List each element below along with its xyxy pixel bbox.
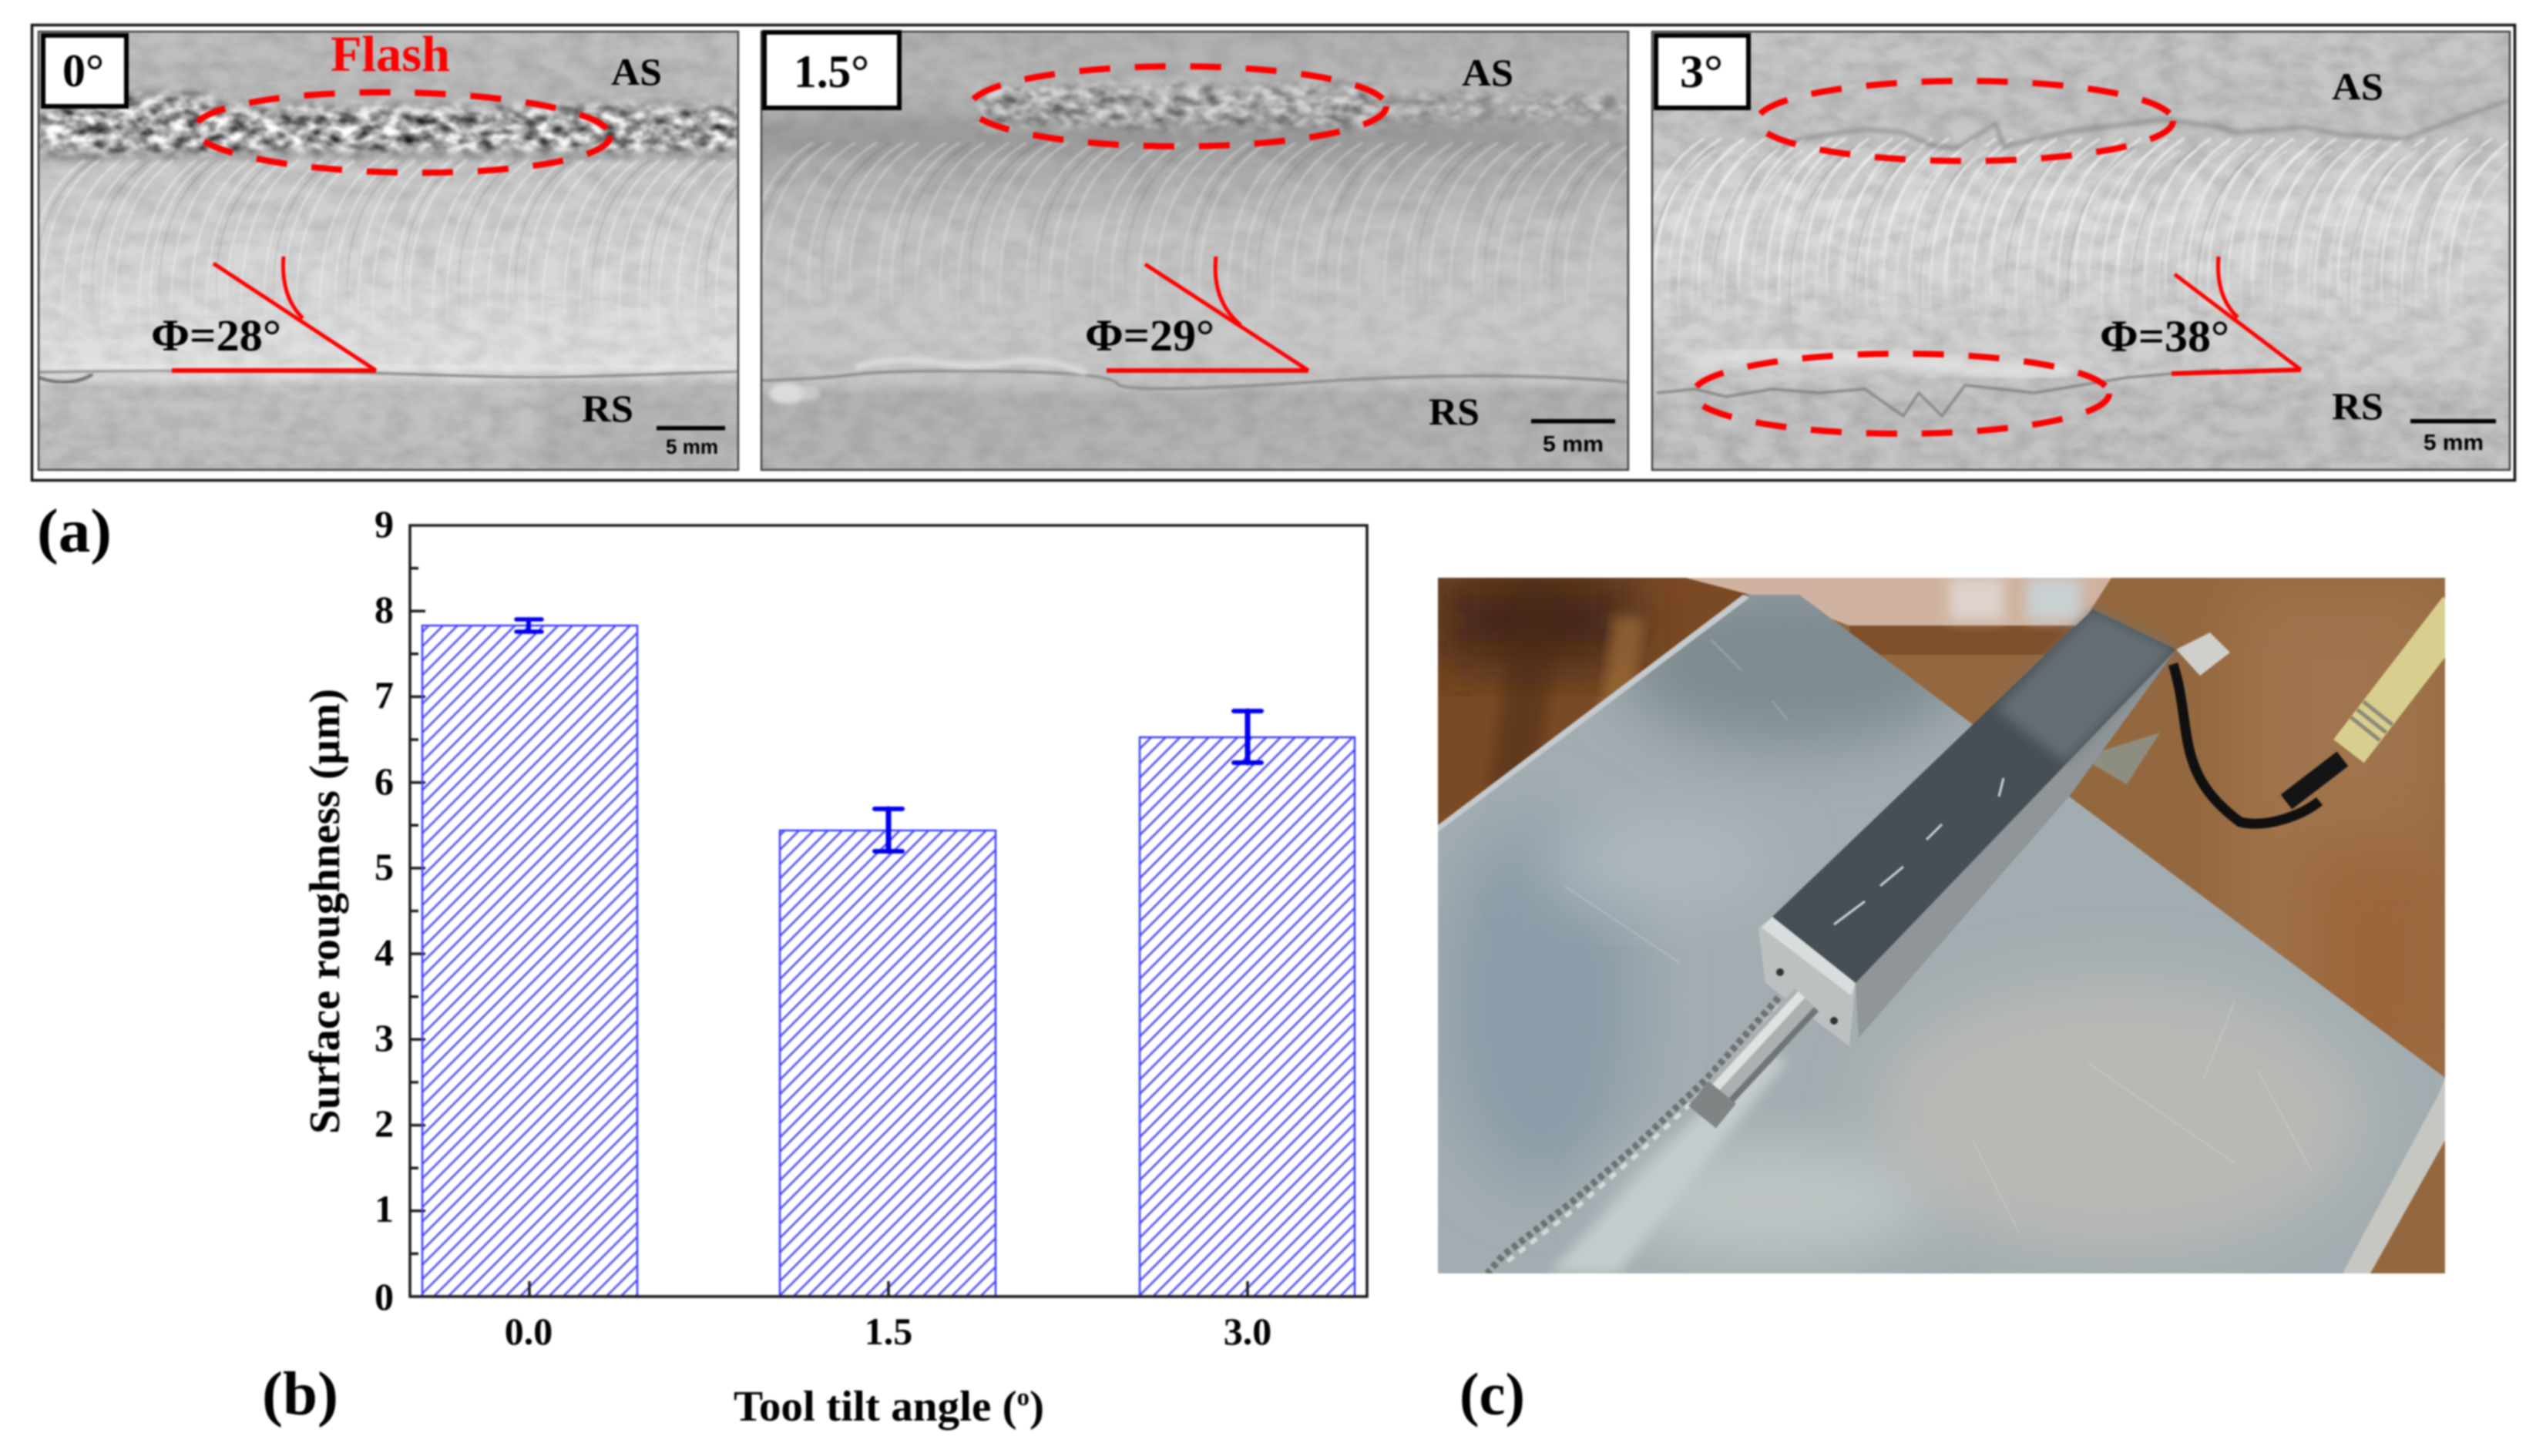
stylus rod	[1702, 995, 1816, 1117]
clamp at far end	[2176, 632, 2230, 676]
callout: lower flash ellipse	[1693, 354, 2109, 434]
panel: tilt angle 3 degrees	[1638, 32, 2527, 470]
y-axis tick labels: 6	[375, 760, 394, 803]
reflection strip at back of table	[1685, 578, 2111, 626]
label: RS: RS	[1429, 390, 1480, 433]
y-axis tick labels: 4	[375, 931, 394, 974]
x-axis tick labels: 1.5	[865, 1310, 912, 1353]
panel: tilt angle 1.5 degrees	[678, 32, 1657, 470]
label: AS: AS	[611, 50, 662, 93]
bar: 3.0 degrees	[1140, 737, 1355, 1297]
y-axis tick labels: 9	[375, 502, 394, 545]
scale bar: 5 mm	[657, 426, 725, 458]
label: phi 29: Φ=29°	[1085, 310, 1214, 361]
aluminium plate	[1438, 578, 2445, 1273]
y-axis tick labels: 7	[375, 673, 394, 716]
y-axis ticks	[410, 569, 425, 1253]
panel (a): weld surface images	[28, 25, 2527, 481]
y-axis tick labels: 1	[375, 1187, 394, 1230]
label: RS: RS	[582, 387, 633, 430]
scale bar: 5 mm: 5 mm	[666, 435, 718, 458]
heading: Flash: Flash	[331, 26, 450, 82]
callout: flash ellipse	[970, 66, 1386, 146]
x-axis tick labels: 3.0	[1224, 1310, 1271, 1353]
callout: upper flash ellipse	[1757, 81, 2173, 161]
panel (c): photo of roughness tester on welded plate	[1438, 578, 2458, 1273]
scale bar: 5 mm: 5 mm	[2423, 431, 2484, 455]
y-axis tick labels: 0	[375, 1275, 394, 1318]
bar: 1.5 degrees	[780, 830, 996, 1297]
connector	[2286, 759, 2343, 802]
bar: 0.0 degrees	[422, 626, 637, 1297]
plot frame	[410, 525, 1367, 1297]
label: 0 degrees	[43, 35, 126, 106]
x-axis tick labels: 0.0	[505, 1310, 553, 1353]
cable	[2173, 664, 2319, 824]
label: 1.5 degrees	[764, 32, 899, 108]
y-axis tick labels: 8	[375, 588, 394, 631]
x-axis title: Tool tilt angle (	[734, 1383, 1011, 1431]
y-axis tick labels: 5	[375, 845, 394, 888]
y-axis tick labels: 2	[375, 1102, 394, 1145]
angle mark: 28 degrees	[172, 257, 376, 371]
weld bead	[1487, 998, 1788, 1273]
x-axis tick labels	[505, 1310, 1271, 1353]
angle mark: 29 degrees	[1107, 257, 1308, 371]
panel label (b): (b)	[262, 1360, 338, 1428]
error bars	[516, 619, 1261, 851]
scale bar: 5 mm	[1531, 419, 1615, 457]
scale bar: 5 mm	[2410, 419, 2496, 455]
panel (b): bar chart of surface roughness	[301, 502, 1367, 1431]
instrument housing	[1758, 609, 2176, 1046]
label: 3 degrees	[1656, 35, 1748, 108]
panel: tilt angle 0 degrees	[28, 26, 794, 470]
panel label (a): (a)	[37, 498, 112, 565]
y-axis tick labels	[375, 502, 394, 1318]
y-axis tick labels: 3	[375, 1016, 394, 1059]
label: AS: AS	[1462, 51, 1513, 94]
scale bar: 5 mm: 5 mm	[1543, 432, 1604, 457]
x-axis title: )	[1030, 1383, 1044, 1431]
callout: flash ellipse	[193, 89, 611, 176]
label: phi 38: Φ=38°	[2100, 311, 2229, 361]
label: 3 degrees: 3°	[1680, 46, 1723, 97]
label: 0 degrees: 0°	[62, 45, 104, 96]
y-axis title: Surface roughness (µm)	[301, 689, 349, 1134]
label: phi 28: Φ=28°	[151, 310, 281, 361]
label: 1.5 degrees: 1.5°	[794, 46, 869, 97]
label: AS: AS	[2332, 65, 2383, 108]
handle	[2349, 609, 2458, 751]
x-axis baseline and ticks	[410, 1281, 1367, 1297]
wood table	[1438, 578, 2445, 1273]
bracket behind instrument	[2086, 733, 2160, 784]
label: RS: RS	[2332, 384, 2383, 428]
x-axis title: o	[1017, 1383, 1030, 1411]
angle mark: 38 degrees	[2172, 257, 2301, 374]
panel label (c): (c)	[1459, 1360, 1525, 1427]
